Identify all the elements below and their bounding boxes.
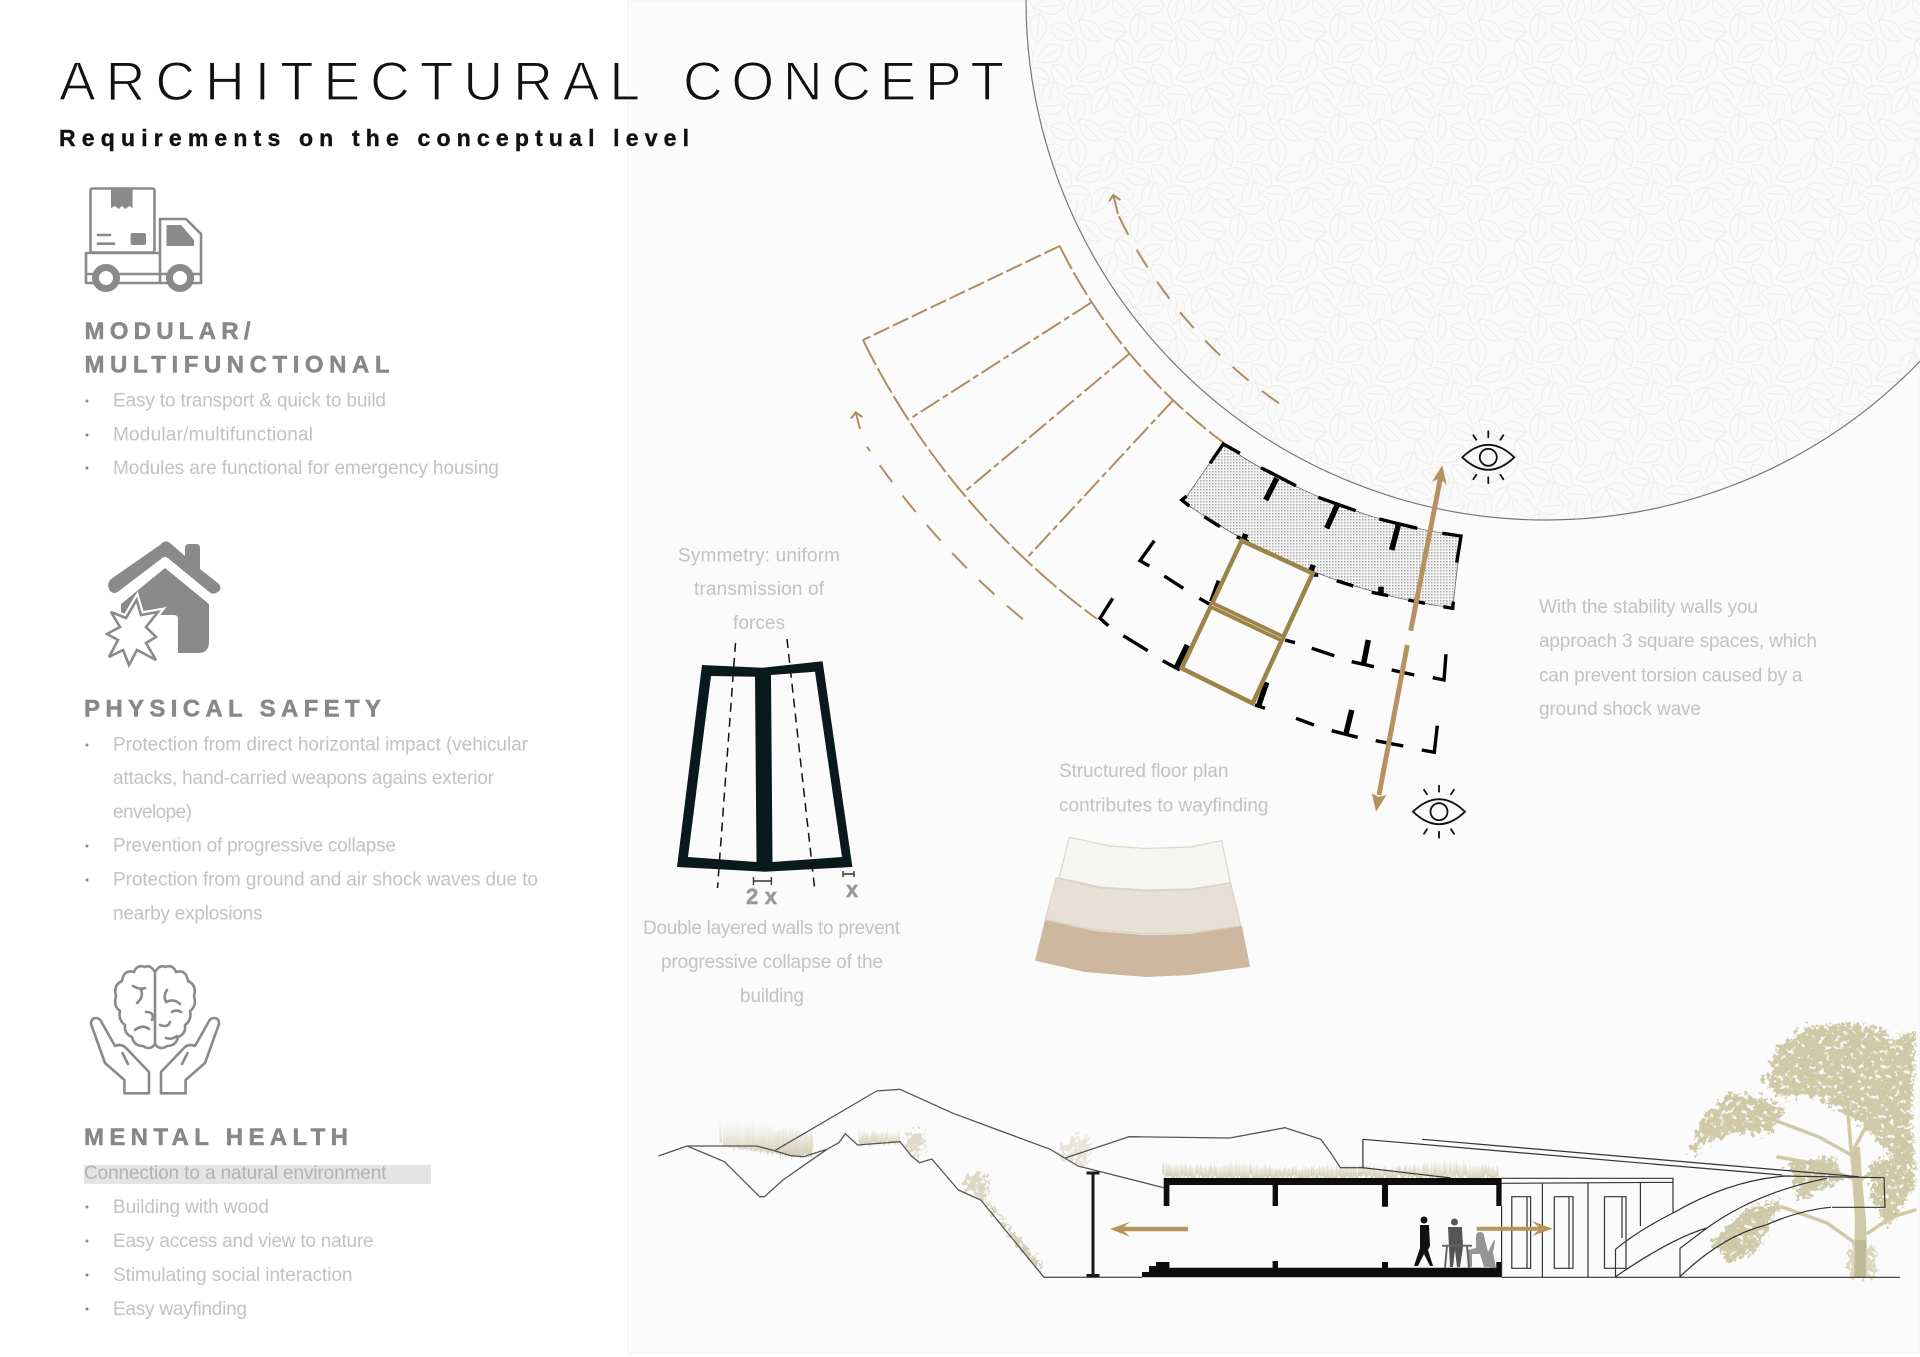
dashed axes bbox=[718, 639, 815, 889]
list: physical safety requirements bbox=[86, 734, 538, 924]
caption: structured floor plan: contributes to wayfinding bbox=[1059, 796, 1268, 816]
highlighted line: connection to nature: Connection to a natural environment bbox=[84, 1163, 387, 1184]
terrain lines bbox=[658, 1089, 1363, 1277]
icon: eye lower bbox=[1413, 786, 1465, 838]
people inside building bbox=[1414, 1216, 1496, 1268]
caption: double layered walls: building bbox=[740, 986, 804, 1007]
heading: multifunctional: MULTIFUNCTIONAL bbox=[84, 352, 390, 378]
diagram: layered floor zones bbox=[1035, 837, 1250, 977]
list: physical safety requirements: Protection from ground and air shock waves due to bbox=[113, 870, 538, 890]
section drawing: landscape and building bbox=[658, 1023, 1915, 1277]
tree bbox=[1690, 1023, 1915, 1277]
caption: stability walls: ground shock wave bbox=[1539, 699, 1701, 720]
heading: physical safety: PHYSICAL SAFETY bbox=[84, 696, 381, 722]
heading: modular: MODULAR/ bbox=[84, 318, 251, 345]
list: physical safety requirements: Prevention of progressive collapse bbox=[113, 836, 396, 856]
dimension ticks bbox=[754, 871, 854, 885]
grass and shrubs bbox=[722, 1124, 1500, 1270]
list: physical safety requirements: Protection from direct horizontal impact (vehicular bbox=[113, 734, 529, 756]
caption: symmetry: forces bbox=[733, 613, 785, 634]
tan module outline bbox=[863, 246, 1224, 619]
heading: mental health: MENTAL HEALTH bbox=[84, 1124, 348, 1151]
tree foliage bbox=[1690, 1023, 1915, 1263]
stippled corridor band bbox=[1183, 444, 1461, 608]
right panel background bbox=[628, 0, 1920, 1353]
list: modular requirements: Modules are functional for emergency housing bbox=[113, 458, 499, 479]
caption: structured floor plan: Structured floor plan bbox=[1059, 761, 1228, 782]
caption: stability walls: approach 3 square spaces, which bbox=[1539, 631, 1817, 652]
caption: symmetry bbox=[678, 546, 840, 634]
title: CONCEPT bbox=[683, 50, 1004, 112]
caption: stability walls bbox=[1539, 597, 1817, 720]
icon: eye upper bbox=[1462, 431, 1514, 483]
title bbox=[59, 50, 1004, 112]
list: modular requirements bbox=[86, 390, 499, 479]
tree base shrub bbox=[1848, 1245, 1876, 1277]
list: physical safety requirements: nearby explosions bbox=[113, 904, 262, 924]
caption: symmetry: Symmetry: uniform bbox=[678, 546, 840, 566]
list: mental health requirements: Easy wayfinding bbox=[113, 1299, 247, 1320]
right arrow bbox=[1477, 1221, 1553, 1236]
section: physical safety bbox=[84, 541, 538, 924]
dimension label 2x: 2 x bbox=[746, 884, 778, 909]
subtitle: Requirements on the conceptual level bbox=[59, 125, 689, 151]
dashed arrow: inner direction bbox=[1109, 195, 1279, 403]
title: ARCHITECTURAL bbox=[59, 50, 640, 112]
icon: delivery truck bbox=[86, 188, 201, 288]
tree trunk bbox=[1849, 1147, 1868, 1277]
list: mental health requirements: Building with wood bbox=[113, 1197, 269, 1218]
caption: double layered walls bbox=[643, 918, 901, 1007]
caption: double layered walls: Double layered walls to prevent bbox=[643, 918, 901, 939]
left arrow bbox=[1110, 1222, 1188, 1237]
list: mental health requirements bbox=[86, 1197, 374, 1320]
height dimension bar bbox=[1086, 1173, 1100, 1276]
icon: house with explosion bbox=[107, 541, 220, 665]
list: mental health requirements: Stimulating social interaction bbox=[113, 1265, 352, 1286]
caption: stability walls: can prevent torsion caused by a bbox=[1539, 666, 1803, 686]
dashed arrow: outer direction bbox=[851, 412, 1023, 619]
site plan bbox=[851, 195, 1514, 838]
gold square rooms bbox=[1182, 541, 1313, 703]
black wall segments bbox=[1100, 444, 1461, 752]
building section in black bbox=[1142, 1178, 1502, 1277]
list: modular requirements: Modular/multifunctional bbox=[113, 424, 313, 446]
caption: symmetry: transmission of bbox=[694, 579, 825, 600]
tree branches bbox=[1713, 1067, 1915, 1247]
icon: brain held by two hands bbox=[91, 966, 219, 1093]
list: physical safety requirements: attacks, hand-carried weapons agains exterior bbox=[113, 768, 495, 789]
list: mental health requirements: Easy access and view to nature bbox=[113, 1231, 374, 1252]
dimension label x: x bbox=[846, 877, 859, 902]
list: modular requirements: Easy to transport & quick to build bbox=[113, 390, 386, 412]
section: modular and multifunctional bbox=[84, 188, 499, 479]
diagram: double layered walls bbox=[677, 639, 859, 909]
list: physical safety requirements: envelope) bbox=[113, 802, 192, 823]
wall plan bbox=[677, 661, 852, 872]
caption: double layered walls: progressive collapse of the bbox=[661, 952, 883, 973]
circular courtyard with leaf pattern bbox=[1026, 0, 1920, 520]
glazed pavilion and roof lines bbox=[1363, 1139, 1900, 1277]
double-headed sightline arrow bbox=[1372, 465, 1447, 812]
caption: stability walls: With the stability walls you bbox=[1539, 597, 1758, 618]
caption: structured floor plan bbox=[1059, 761, 1268, 816]
section: mental health bbox=[84, 966, 431, 1320]
